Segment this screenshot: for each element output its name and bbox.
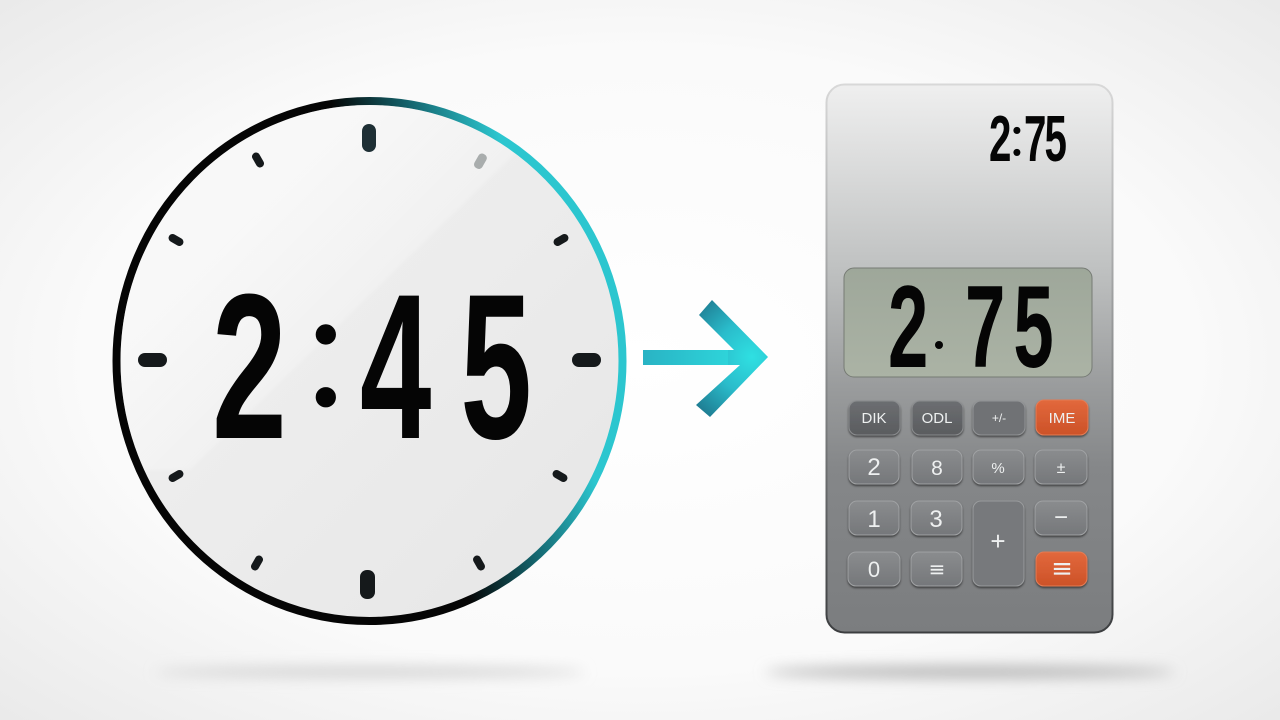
key equals grey bbox=[911, 552, 962, 586]
calculator bbox=[826, 84, 1112, 632]
key equals grey: ≡ bbox=[929, 557, 945, 581]
key plus: + bbox=[990, 526, 1006, 556]
key plus bbox=[973, 501, 1024, 586]
small time readout 2:75 bbox=[989, 102, 1067, 175]
key DIK bbox=[849, 401, 900, 435]
key orange top bbox=[1036, 400, 1088, 435]
key minus: − bbox=[1054, 504, 1068, 531]
hour and minute tick marks bbox=[138, 124, 601, 599]
clock ground shadow bbox=[155, 667, 585, 677]
key 3 bbox=[911, 501, 962, 535]
key 0 bbox=[848, 552, 900, 586]
clock bbox=[100, 90, 622, 621]
key 2: 2 bbox=[867, 454, 881, 481]
clock time readout 2:45: 45 bbox=[360, 252, 532, 482]
key percent bbox=[973, 450, 1024, 484]
key equals orange bbox=[1036, 552, 1087, 586]
key DIK: DIK bbox=[861, 410, 887, 427]
key 2 bbox=[849, 450, 899, 484]
LCD value 2.75: 2 bbox=[888, 261, 928, 392]
LCD display bbox=[844, 268, 1092, 377]
clock face bbox=[116, 101, 622, 621]
key ODL: ODL bbox=[922, 410, 952, 427]
clock time readout 2:45 bbox=[212, 251, 532, 482]
key minus bbox=[1035, 501, 1087, 535]
key 8: 8 bbox=[931, 457, 943, 480]
calculator body bbox=[826, 84, 1112, 632]
key plus-minus bbox=[1035, 450, 1087, 484]
clock time readout 2:45: : bbox=[302, 253, 350, 443]
key 0: 0 bbox=[868, 557, 880, 582]
small time readout 2:75: : bbox=[1009, 102, 1025, 168]
key 1: 1 bbox=[867, 506, 881, 533]
clock time readout 2:45: 2 bbox=[212, 251, 287, 482]
arrow bbox=[643, 300, 768, 417]
key 3: 3 bbox=[929, 506, 943, 533]
key ODL bbox=[912, 401, 963, 435]
key orange top: IME bbox=[1049, 410, 1075, 427]
key equals orange: ≡ bbox=[1051, 554, 1073, 584]
keypad bbox=[848, 400, 1088, 586]
calculator ground shadow bbox=[765, 666, 1175, 678]
small time readout 2:75: 2 bbox=[989, 103, 1011, 175]
LCD value 2.75: 75 bbox=[965, 261, 1054, 392]
small time readout 2:75: 75 bbox=[1024, 103, 1067, 175]
key 8 bbox=[912, 450, 962, 484]
key symbol bbox=[973, 401, 1025, 435]
LCD value 2.75 bbox=[888, 261, 1054, 392]
key symbol: +/- bbox=[992, 411, 1006, 425]
key 1 bbox=[849, 501, 899, 535]
glass highlight bbox=[120, 105, 514, 470]
key percent: % bbox=[991, 460, 1005, 477]
key plus-minus: ± bbox=[1057, 460, 1066, 477]
